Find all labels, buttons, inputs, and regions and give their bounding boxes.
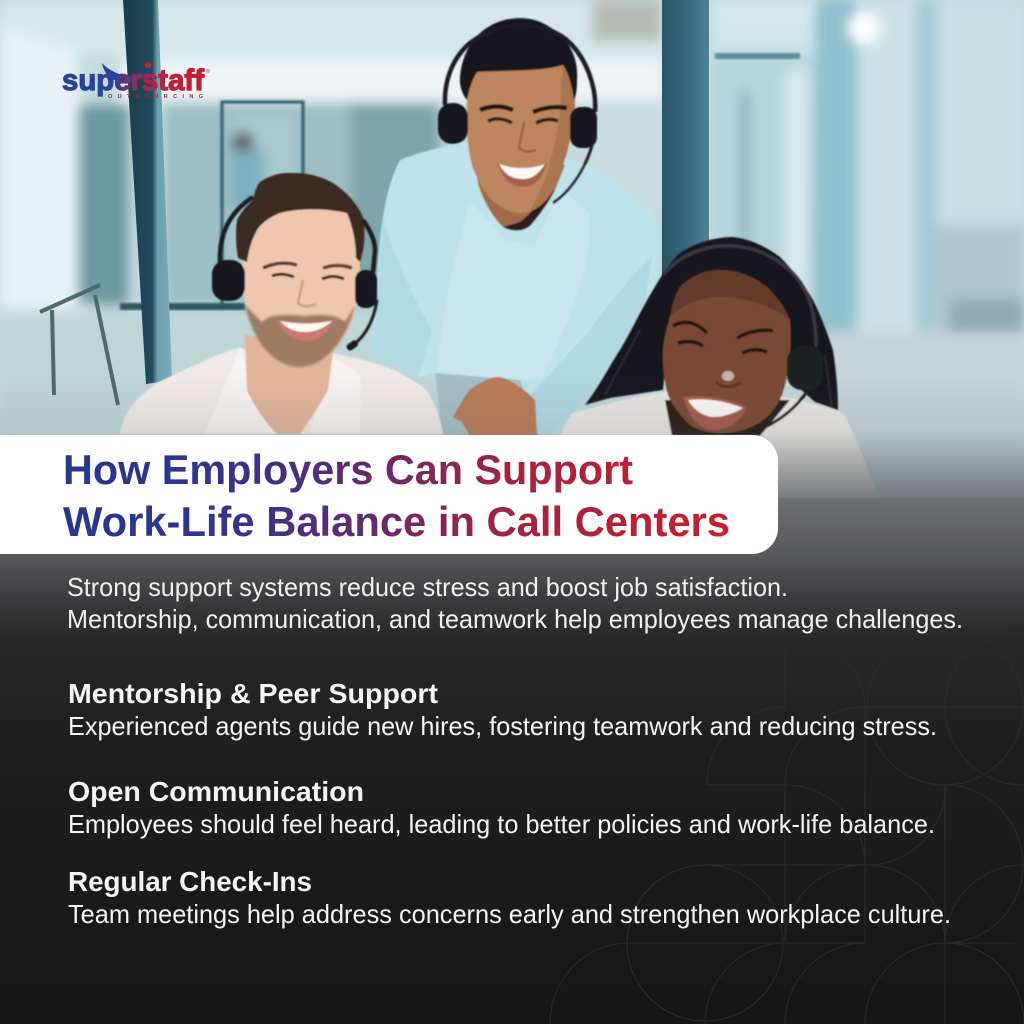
person: pointing hand bbox=[453, 377, 537, 436]
eyes and brows bbox=[480, 106, 567, 112]
section: open communication: Employees should feel heard, leading to better policies and work-life balance. bbox=[68, 809, 935, 839]
person: standing man with headset bbox=[367, 18, 659, 436]
nose bbox=[716, 382, 741, 387]
hair bbox=[236, 173, 364, 262]
neck bbox=[476, 164, 566, 228]
section: mentorship and peer support: Experienced agents guide new hires, fostering teamwork and reducing stress. bbox=[68, 711, 937, 741]
shirt bbox=[367, 142, 659, 434]
section: regular check-ins bbox=[68, 866, 951, 929]
intro text bbox=[67, 572, 963, 634]
smile bbox=[276, 320, 334, 341]
section: open communication: Open Communication bbox=[68, 776, 364, 807]
background photo: office and call center agents bbox=[0, 0, 1024, 502]
logo: superstaff outsourcing: superstaff bbox=[62, 64, 205, 97]
title text: Work-Life Balance in Call Centers bbox=[63, 498, 730, 545]
smile bbox=[683, 396, 747, 430]
nose bbox=[298, 280, 316, 306]
table legs bbox=[40, 285, 118, 405]
section: mentorship and peer support bbox=[68, 678, 937, 741]
logo: superstaff outsourcing: ® bbox=[206, 68, 210, 75]
brows and eyes bbox=[263, 263, 352, 268]
neck bbox=[245, 335, 334, 434]
title text bbox=[63, 446, 730, 545]
photo fade overlay bbox=[0, 399, 1024, 498]
headset bbox=[445, 25, 595, 112]
headset bbox=[663, 246, 816, 347]
smile bbox=[497, 163, 547, 187]
dark gradient panel bbox=[0, 498, 1024, 1024]
stubble bbox=[245, 305, 355, 367]
pillar right bbox=[662, 0, 709, 280]
intro text: Strong support systems reduce stress and boost job satisfaction. bbox=[67, 572, 788, 602]
geometric line pattern bbox=[550, 629, 1024, 1024]
logo: superstaff outsourcing: OUTSOURCING bbox=[108, 94, 203, 100]
section: regular check-ins: Team meetings help address concerns early and strengthen workplace culture. bbox=[68, 899, 951, 929]
face bbox=[467, 65, 575, 213]
face bbox=[663, 270, 791, 433]
braids bbox=[585, 237, 838, 410]
person: seated woman with headset bbox=[560, 237, 880, 498]
title text: How Employers Can Support bbox=[63, 446, 633, 493]
door frame and glass bbox=[222, 102, 303, 308]
title banner bbox=[0, 435, 778, 554]
trousers bbox=[435, 370, 540, 436]
section: mentorship and peer support: Mentorship & Peer Support bbox=[68, 678, 438, 709]
pillar left bbox=[123, 0, 172, 384]
blazer bbox=[560, 392, 880, 498]
person: seated man with headset bbox=[120, 173, 443, 434]
nose bbox=[519, 122, 536, 152]
hair bbox=[460, 18, 577, 100]
intro text: Mentorship, communication, and teamwork help employees manage challenges. bbox=[67, 604, 963, 634]
section: regular check-ins: Regular Check-Ins bbox=[68, 866, 312, 897]
brows and eyes bbox=[673, 322, 773, 338]
section: open communication bbox=[68, 776, 935, 839]
face bbox=[243, 209, 360, 367]
shirt bbox=[120, 347, 443, 434]
headset bbox=[220, 197, 375, 273]
neck shadow bbox=[665, 400, 790, 436]
